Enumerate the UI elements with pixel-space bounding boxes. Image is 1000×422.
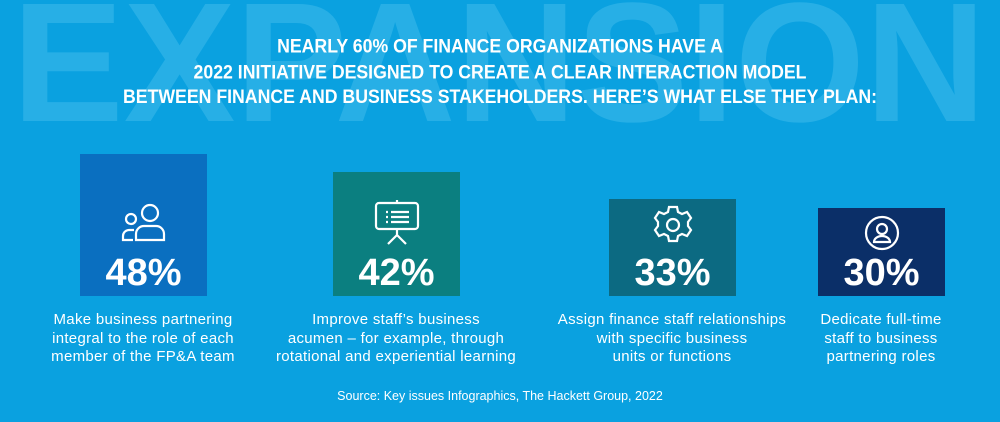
text: 30%: Dedicate full-time <box>820 311 942 328</box>
text: 48%: integral to the role of each <box>52 330 234 346</box>
title: BETWEEN FINANCE AND BUSINESS STAKEHOLDERS. HERE’S WHAT ELSE THEY PLAN: <box>123 86 877 107</box>
icon: presentation board <box>374 200 420 245</box>
panel: 42% <box>333 172 460 296</box>
percentage: 48% <box>105 252 182 294</box>
icon: person circle <box>864 216 900 250</box>
text: 48%: member of the FP&A team <box>51 348 235 365</box>
text: 30% <box>820 311 942 365</box>
text: 42%: rotational and experiential learning <box>276 348 516 365</box>
panel: 48% <box>80 154 207 296</box>
title <box>123 35 877 107</box>
title: NEARLY 60% OF FINANCE ORGANIZATIONS HAVE A <box>277 35 723 57</box>
text: 33%: Assign finance staff relationships <box>558 311 786 328</box>
text: 33% <box>558 311 786 365</box>
percentage: 30% <box>843 252 920 294</box>
text: 42% <box>276 311 516 365</box>
text: 33%: with specific business <box>597 330 747 346</box>
icon: gear <box>654 206 692 242</box>
text: 48%: Make business partnering <box>54 311 232 328</box>
text: 42%: acumen – for example, through <box>288 330 504 346</box>
source: Source: Key issues Infographics, The Hackett Group, 2022 <box>337 389 663 403</box>
icon: people <box>122 204 166 242</box>
text: 30%: staff to business <box>824 330 938 346</box>
text: 48% <box>51 311 235 365</box>
text: 42%: Improve staff’s business <box>312 311 480 328</box>
percentage: 42% <box>358 252 435 294</box>
panel: 33% <box>609 199 736 296</box>
title: 2022 INITIATIVE DESIGNED TO CREATE A CLEAR INTERACTION MODEL <box>194 60 806 82</box>
panel: 30% <box>818 208 945 296</box>
percentage: 33% <box>634 252 711 294</box>
text: 33%: units or functions <box>613 348 731 365</box>
text: 30%: partnering roles <box>826 348 936 365</box>
